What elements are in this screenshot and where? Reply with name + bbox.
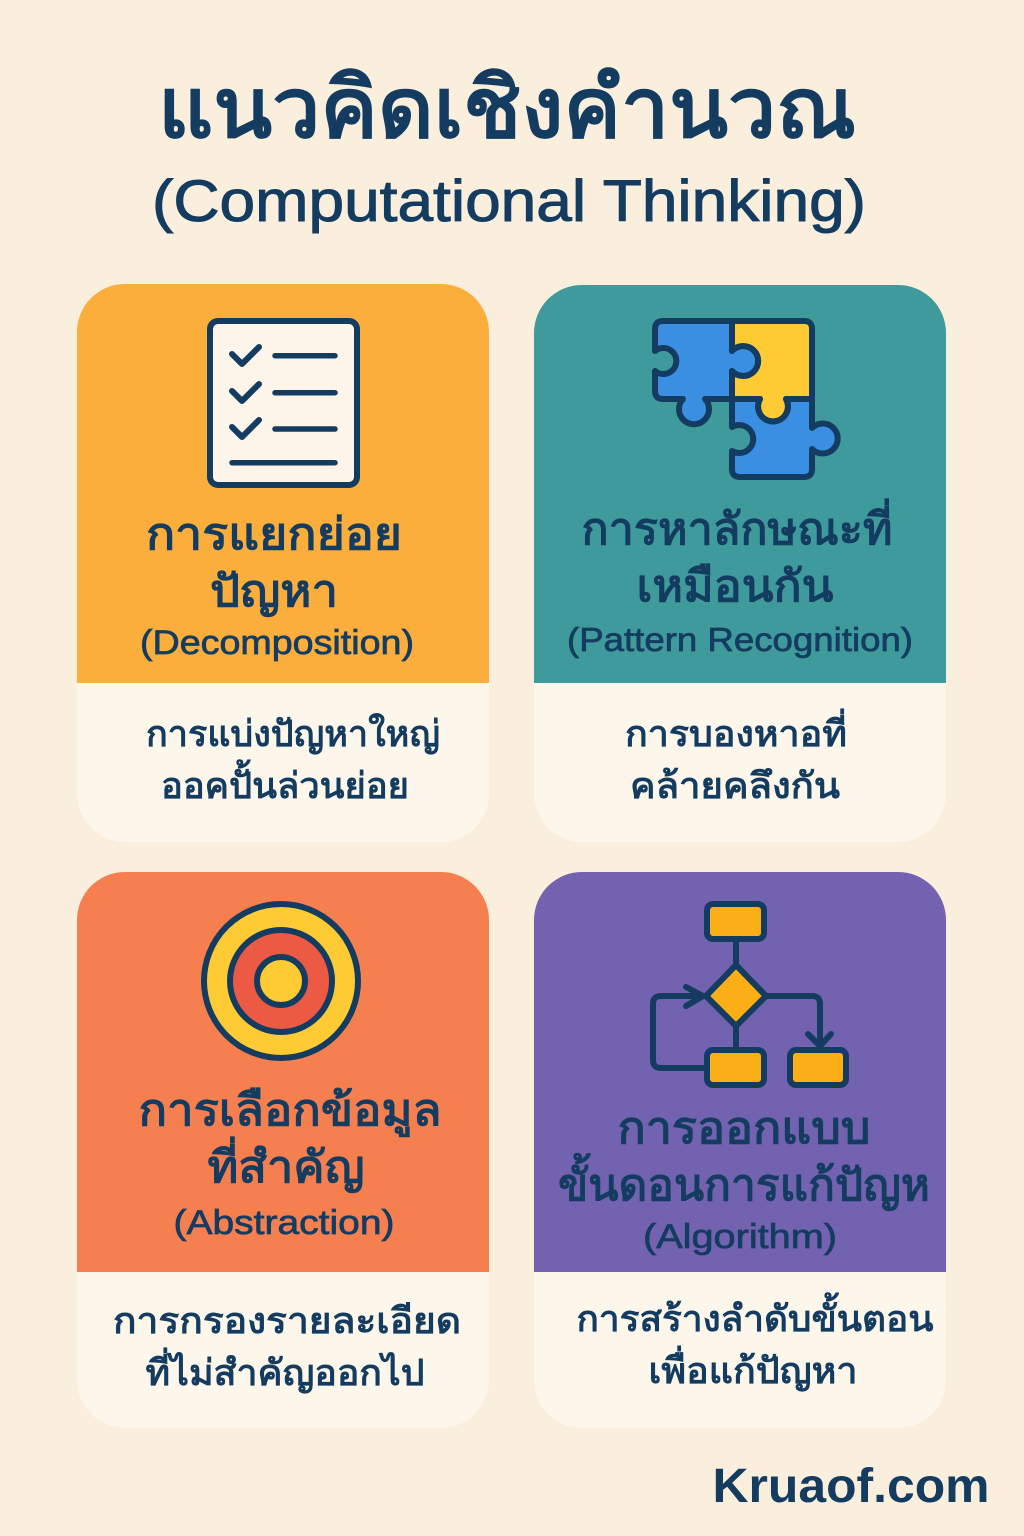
panel: decomposition — [77, 284, 489, 842]
heading: abstraction — [138, 1086, 442, 1242]
description: abstraction: ที่ไม่สำคัญออกไป — [146, 1347, 424, 1394]
title: แนวคิดเชิงคำนวณ — [158, 61, 856, 155]
title — [152, 61, 866, 234]
heading: decomposition: การแยกย่อย — [146, 510, 402, 559]
title: (Computational Thinking) — [152, 169, 866, 234]
heading: pattern recognition: การหาลักษณะที่ — [582, 498, 892, 554]
description: abstraction: การกรองรายละเอียด — [113, 1300, 461, 1341]
heading: decomposition — [140, 510, 414, 662]
description: decomposition: ออคปั้นล่วนย่อย — [161, 759, 409, 806]
heading: abstraction: การเลือกข้อมูล — [138, 1086, 442, 1137]
icon: target — [204, 904, 358, 1058]
panel: pattern recognition — [534, 285, 946, 842]
heading: algorithm — [558, 1104, 930, 1256]
panel: algorithm — [534, 872, 946, 1428]
description: decomposition — [146, 712, 440, 806]
icon: flowchart — [653, 904, 846, 1085]
description: algorithm: การสร้างลำดับขั้นตอน — [576, 1292, 934, 1339]
description: algorithm: เพื่อแก้ปัญหา — [648, 1345, 858, 1392]
brand label: Kruaof.com — [712, 1460, 990, 1513]
heading: algorithm: การออกแบบ — [618, 1104, 870, 1153]
icon: checklist — [210, 321, 357, 485]
heading: abstraction: (Abstraction) — [174, 1204, 394, 1242]
icon: puzzle — [655, 321, 838, 477]
description: decomposition: การแบ่งปัญหาใหญ่ — [146, 712, 440, 755]
heading: algorithm: (Algorithm) — [643, 1218, 837, 1256]
description: pattern recognition: คล้ายคลึงกัน — [630, 765, 840, 806]
heading: pattern recognition — [567, 498, 913, 658]
heading: pattern recognition: (Pattern Recognition) — [567, 621, 913, 658]
heading: algorithm: ขั้นดอนการแก้ปัญห — [558, 1152, 930, 1211]
heading: abstraction: ที่สำคัญ — [208, 1136, 364, 1193]
description: pattern recognition — [625, 708, 847, 806]
description: abstraction — [113, 1300, 461, 1394]
heading: pattern recognition: เหมือนกัน — [636, 562, 834, 611]
heading: decomposition: ปัญหา — [210, 567, 338, 617]
heading: decomposition: (Decomposition) — [140, 624, 414, 662]
description: pattern recognition: การบองหาอที่ — [625, 708, 847, 754]
description: algorithm — [576, 1292, 934, 1392]
panel: abstraction — [77, 872, 489, 1428]
